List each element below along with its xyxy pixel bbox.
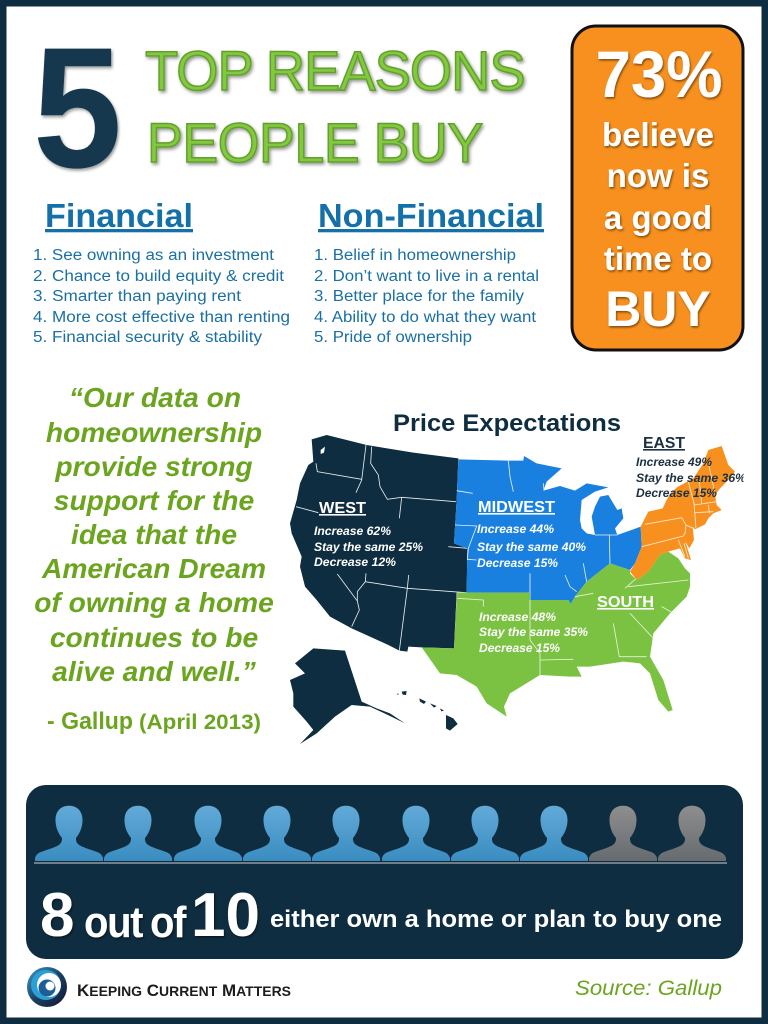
label: east: EAST [643,435,685,452]
quote: gallup on homeownership: “Our data on [69,381,241,413]
list: financial reasons: 2. Chance to build equity & credit [33,268,285,285]
callout: 73% believe now is a good time to buy [572,26,743,350]
label: west: Stay the same 25% [314,542,423,554]
region: south [422,552,690,717]
label: south [479,594,654,655]
panel: non-financial reasons [314,197,544,346]
list: financial reasons [33,247,290,346]
list: non-financial reasons: 4. Ability to do what they want [314,309,537,326]
label: west: Decrease 12% [314,557,396,569]
statistic: 8 out of 10 [40,881,260,950]
statistic: 8 out of 10: out of [84,897,187,946]
list: non-financial reasons: 2. Don’t want to live in a rental [314,268,539,285]
quote attribution: - Gallup [47,708,133,735]
panel: 8 out of 10 [26,785,743,959]
list: non-financial reasons: 1. Belief in homeownership [314,247,516,264]
list: financial reasons: 4. More cost effective than renting [33,309,290,326]
statistic caption: either own a home or plan to buy one [270,906,722,933]
label: south: Increase 48% [479,612,556,624]
callout: 73% believe now is a good time to buy: now is [607,157,709,194]
quote: gallup on homeownership: alive and well.” [52,655,257,687]
label: west: WEST [319,500,366,517]
title: top reasons people buy: TOP REASONS [145,39,525,102]
panel: financial reasons [33,197,290,346]
quote: gallup on homeownership: provide strong [54,450,253,482]
list: financial reasons: 5. Financial security & stability [33,329,262,346]
label: midwest [477,499,586,570]
list: non-financial reasons: 3. Better place for the family [314,288,524,305]
quote attribution [47,708,261,735]
quote attribution: (April 2013) [139,711,261,734]
label: east: Increase 49% [636,457,712,469]
label: midwest: Decrease 15% [477,558,558,570]
list: financial reasons: 3. Smarter than paying rent [33,288,242,305]
list: financial reasons: 1. See owning as an investment [33,247,275,264]
heading: financial: Financial [45,197,193,234]
title: top reasons people buy: PEOPLE BUY [147,111,483,174]
region: hawaii [397,691,458,731]
map heading: Price Expectations [393,410,621,437]
label: east: Decrease 15% [636,488,717,500]
quote: gallup on homeownership: idea that the [71,518,237,550]
quote: gallup on homeownership: American Dream [41,552,266,584]
label: east: Stay the same 36% [636,473,746,485]
quote: gallup on homeownership [34,381,274,687]
callout: 73% believe now is a good time to buy: BUY [605,281,711,337]
chart: us map by region [290,435,746,744]
title: big number 5: 5 [33,13,122,204]
list: non-financial reasons: 5. Pride of ownership [314,329,472,346]
statistic: 8 out of 10: 8 [40,881,74,950]
region: east [630,446,735,580]
logo: keeping current matters: KEEPING CURRENT MATTERS [77,981,291,1000]
label: east [636,435,746,500]
callout: 73% believe now is a good time to buy: time to [604,240,712,277]
icons: row of ten people [34,806,727,864]
label: midwest: Increase 44% [477,524,554,536]
heading: non-financial: Non-Financial [318,197,544,234]
label: south: SOUTH [597,594,654,611]
region: midwest [454,456,642,604]
quote: gallup on homeownership: support for the [54,484,254,516]
label: midwest: Stay the same 40% [477,542,586,554]
callout: 73% believe now is a good time to buy: 73% [596,37,722,111]
list: non-financial reasons [314,247,539,346]
title: top reasons people buy [145,39,525,174]
label: west: Increase 62% [314,526,391,538]
label: south: Decrease 15% [479,643,560,655]
quote: gallup on homeownership: of owning a home [34,586,274,618]
label: west [314,500,423,569]
quote: gallup on homeownership: continues to be [50,621,258,653]
statistic: 8 out of 10: 10 [191,881,260,950]
icon: swirl [27,967,67,1007]
logo: keeping current matters [27,967,291,1007]
source: Source: Gallup [575,977,722,1000]
quote: gallup on homeownership: homeownership [46,416,262,448]
label: midwest: MIDWEST [478,499,555,516]
callout: 73% believe now is a good time to buy: believe [602,116,714,153]
callout: 73% believe now is a good time to buy: a good [604,199,712,236]
region: alaska [290,648,405,744]
region: west [290,435,467,652]
label: south: Stay the same 35% [479,627,588,639]
